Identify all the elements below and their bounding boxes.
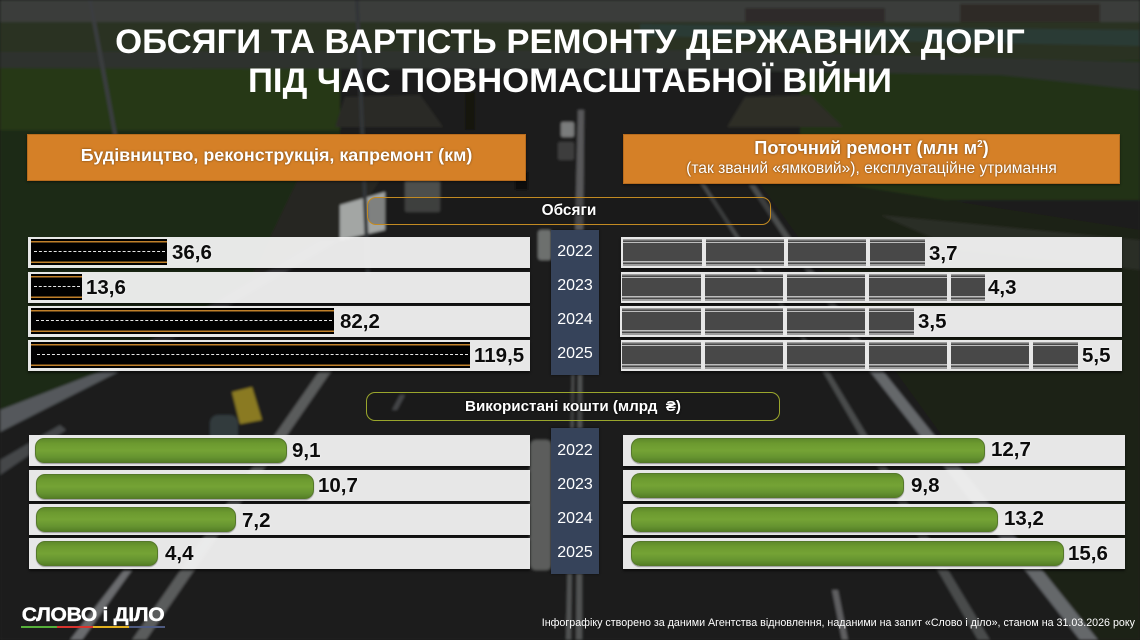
row 2024 (623, 504, 1125, 535)
year column: funds: 2025 (557, 544, 593, 561)
row 2025: 4,4 (165, 542, 194, 565)
row 2025 (28, 340, 530, 371)
section label: volumes (367, 197, 771, 225)
row 2025 (623, 538, 1125, 569)
row 2022: 9,1 (292, 439, 320, 462)
year column: funds: 2024 (557, 510, 593, 527)
row 2022 (623, 435, 1125, 466)
panel: funds, current repairs (623, 435, 1125, 572)
row 2025: 15,6 (1068, 542, 1108, 565)
row 2023: 10,7 (318, 474, 358, 497)
year column: volumes: 2024 (557, 311, 593, 328)
row 2022: 3,7 (929, 242, 958, 265)
row 2023 (621, 272, 1122, 303)
row 2022: 12,7 (991, 438, 1031, 461)
title: ПІД ЧАС ПОВНОМАСШТАБНОЇ ВІЙНИ (248, 62, 892, 100)
heading: construction (27, 134, 526, 181)
row 2023: 9,8 (911, 474, 940, 497)
section label: funds used: Використані кошти (млрд ₴) (465, 398, 681, 415)
year column: funds: 2023 (557, 476, 593, 493)
row 2023 (28, 272, 530, 303)
row 2022 (29, 435, 530, 466)
row 2025 (29, 538, 530, 569)
row 2025: 5,5 (1082, 344, 1110, 367)
row 2024: 13,2 (1004, 507, 1044, 530)
row 2024 (28, 306, 530, 337)
panel: volumes, current repairs million m2 (620, 237, 1122, 374)
year column: volumes (551, 230, 599, 375)
row 2024: 7,2 (242, 509, 270, 532)
year column: volumes: 2025 (557, 345, 593, 362)
row 2024: 3,5 (918, 310, 946, 333)
row 2024 (620, 306, 1122, 337)
panel: volumes, construction km (28, 237, 530, 374)
row 2023 (29, 470, 530, 501)
row 2025: 119,5 (474, 344, 524, 367)
row 2023 (623, 470, 1125, 501)
title (115, 23, 1025, 100)
row 2022 (28, 237, 530, 268)
row 2024: 82,2 (340, 310, 380, 333)
logo: Слово і Діло: СЛОВО і ДІЛО (22, 604, 164, 626)
row 2024 (29, 504, 530, 535)
year column: volumes: 2022 (557, 243, 593, 260)
source note: Інфографіку створено за даними Агентства відновлення, наданими на запит «Слово і діло», станом на 31.03.2026 року (542, 617, 1135, 629)
row 2025 (621, 340, 1122, 371)
title: ОБСЯГИ ТА ВАРТІСТЬ РЕМОНТУ ДЕРЖАВНИХ ДОРІГ (115, 23, 1025, 61)
section label: volumes: Обсяги (542, 202, 596, 219)
year column: funds (551, 428, 599, 574)
row 2023: 4,3 (988, 276, 1016, 299)
heading: construction: Будівництво, реконструкція, капремонт (км) (81, 145, 472, 165)
row 2023: 13,6 (86, 276, 126, 299)
row 2022: 36,6 (172, 241, 212, 264)
heading: current repairs (623, 134, 1120, 184)
year column: volumes: 2023 (557, 277, 593, 294)
panel: funds, construction (28, 435, 531, 572)
heading: current repairs: Поточний ремонт (млн м2) (754, 138, 989, 158)
row 2022 (621, 237, 1122, 268)
year column: funds: 2022 (557, 442, 593, 459)
heading: current repairs: (так званий «ямковий»), експлуатаційне утримання (686, 160, 1057, 177)
section label: funds used (366, 392, 780, 421)
